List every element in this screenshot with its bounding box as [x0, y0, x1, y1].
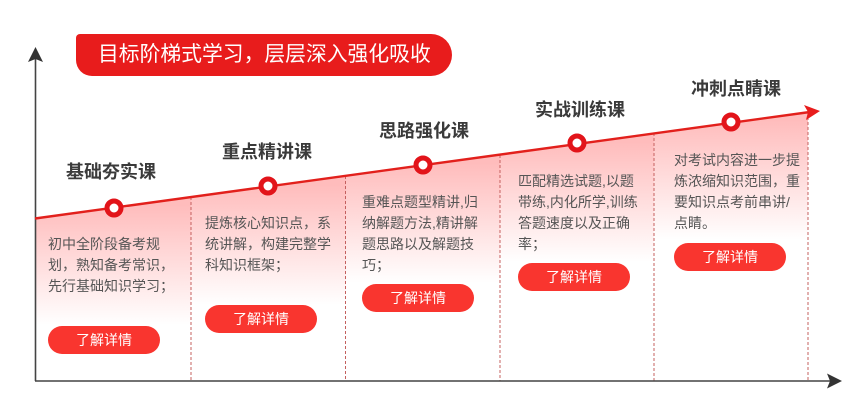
- panel: 重点精讲课: [205, 142, 331, 333]
- description: 率；: [518, 236, 546, 252]
- rising red arrow line: [35, 105, 820, 218]
- description: 题思路以及解题技: [362, 236, 474, 252]
- description: 点睛。: [674, 215, 716, 231]
- gradient area under the line: [36, 112, 808, 381]
- heading: 基础夯实课: [66, 162, 156, 182]
- description: 划，熟知备考常识，: [48, 257, 174, 273]
- description: 巧；: [362, 257, 390, 273]
- description: 答题速度以及正确: [518, 215, 630, 231]
- button: [205, 305, 317, 333]
- description: [205, 215, 331, 273]
- button: 了解详情: [233, 311, 289, 327]
- title banner: [76, 34, 452, 76]
- panel: 思路强化课: [362, 121, 478, 312]
- button: [48, 326, 160, 354]
- description: 纳解题方法,精讲解: [362, 215, 478, 231]
- description: 先行基础知识学习；: [48, 278, 174, 294]
- heading: 思路强化课: [379, 121, 469, 141]
- button: 了解详情: [390, 290, 446, 306]
- vertical axis with arrow: [28, 47, 43, 381]
- button: 了解详情: [702, 249, 758, 265]
- description: [674, 152, 800, 231]
- description: 要知识点考前串讲/: [674, 194, 790, 210]
- description: [362, 194, 478, 273]
- milestone markers: [107, 115, 738, 215]
- title banner: 目标阶梯式学习，层层深入强化吸收: [98, 43, 431, 66]
- description: 匹配精选试题,以题: [518, 173, 634, 189]
- panel: 冲刺点睛课: [674, 79, 800, 271]
- description: [48, 236, 174, 294]
- description: [518, 173, 638, 252]
- button: [518, 263, 630, 291]
- description: 初中全阶段备考规: [48, 236, 160, 252]
- button: [674, 243, 786, 271]
- description: 带练,内化所学,训练: [518, 194, 638, 210]
- horizontal axis with arrow: [35, 374, 842, 388]
- description: 统讲解，构建完整学: [205, 236, 331, 252]
- panel: 基础夯实课: [48, 162, 174, 354]
- description: 炼浓缩知识范围，重: [674, 173, 800, 189]
- panel: 实战训练课: [518, 100, 638, 291]
- heading: 重点精讲课: [222, 142, 312, 162]
- button: 了解详情: [76, 332, 132, 348]
- description: 提炼核心知识点，系: [205, 215, 331, 231]
- button: [362, 284, 474, 312]
- heading: 冲刺点睛课: [691, 79, 781, 99]
- description: 重难点题型精讲,归: [362, 194, 478, 210]
- heading: 实战训练课: [535, 100, 625, 120]
- description: 科知识框架；: [205, 257, 289, 273]
- description: 对考试内容进一步提: [674, 152, 800, 168]
- button: 了解详情: [546, 269, 602, 285]
